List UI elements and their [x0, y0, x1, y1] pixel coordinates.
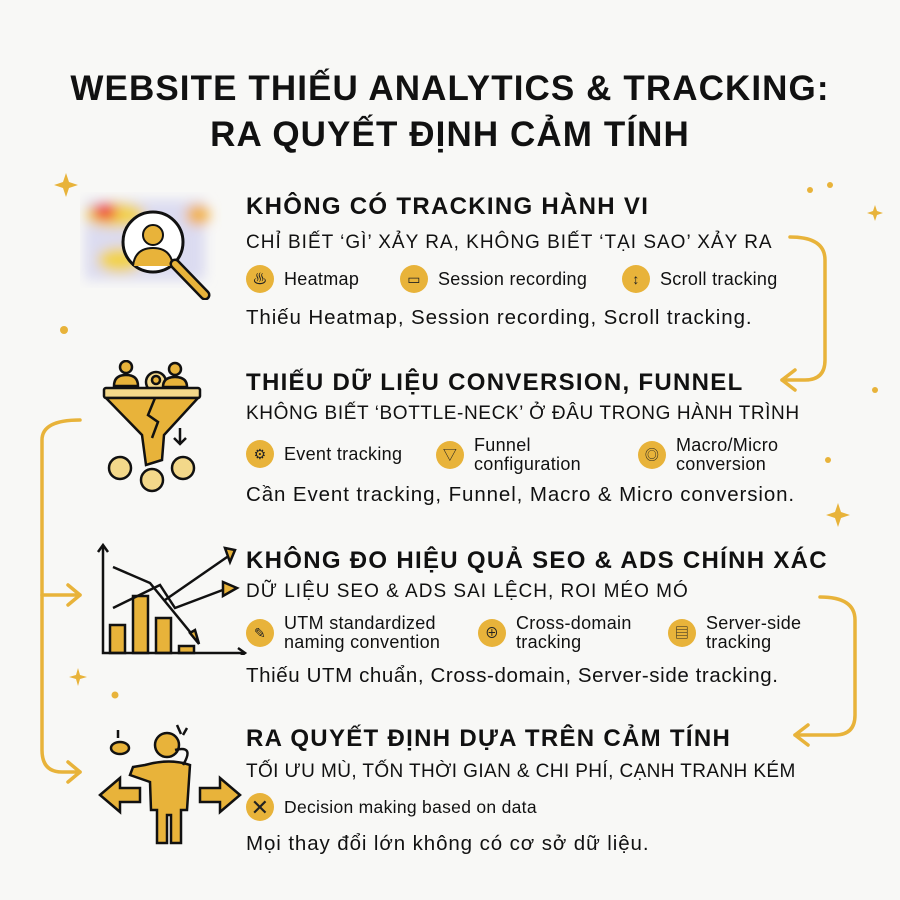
section 3: Server-side — [706, 613, 801, 633]
section 3: ⊕ — [485, 624, 499, 640]
section 2: ◎ — [645, 446, 659, 462]
icon: confused person — [98, 724, 242, 844]
heading 3: KHÔNG ĐO HIỆU QUẢ SEO & ADS CHÍNH XÁC — [246, 547, 828, 574]
icon: heatmap magnifier — [80, 194, 218, 300]
body 4: Mọi thay đổi lớn không có cơ sở dữ liệu. — [246, 832, 649, 855]
section 3 — [246, 546, 828, 687]
section 4 — [246, 724, 796, 855]
chips 1: Session recording — [438, 268, 587, 288]
chip 4: Decision making based on data — [284, 796, 537, 816]
section 2: Macro/Micro — [676, 435, 778, 455]
chips 2: ⚙ — [254, 446, 266, 462]
icon: chart — [97, 543, 247, 655]
heading 4: RA QUYẾT ĐỊNH DỰA TRÊN CẢM TÍNH — [246, 725, 731, 752]
chip 4 — [246, 793, 537, 821]
chips 3 — [246, 613, 440, 652]
chips 1: Scroll tracking — [660, 268, 778, 288]
subheading 4: TỐI ƯU MÙ, TỐN THỜI GIAN & CHI PHÍ, CẠNH TRANH KÉM — [246, 761, 796, 782]
title: RA QUYẾT ĐỊNH CẢM TÍNH — [210, 115, 690, 154]
chips 1 — [246, 265, 778, 293]
title: WEBSITE THIẾU ANALYTICS & TRACKING: — [70, 69, 830, 108]
chip 4: ✕ — [251, 794, 269, 820]
chips 1: Heatmap — [284, 268, 359, 288]
icon: broken funnel — [102, 360, 202, 492]
section 3: tracking — [706, 632, 771, 652]
chips 1: ↕ — [632, 270, 640, 286]
subheading 2: KHÔNG BIẾT ‘BOTTLE-NECK’ Ở ĐÂU TRONG HÀNH TRÌNH — [246, 403, 800, 424]
title — [70, 68, 830, 154]
section 2: Funnel — [474, 435, 531, 455]
section 2: ▽ — [443, 446, 457, 462]
heading 2: THIẾU DỮ LIỆU CONVERSION, FUNNEL — [246, 369, 744, 396]
chips 1: ♨ — [253, 270, 267, 286]
subheading 1: CHỈ BIẾT ‘GÌ’ XẢY RA, KHÔNG BIẾT ‘TẠI SAO’ XẢY RA — [246, 232, 773, 253]
subheading 3: DỮ LIỆU SEO & ADS SAI LỆCH, ROI MÉO MÓ — [246, 581, 689, 602]
body 1: Thiếu Heatmap, Session recording, Scroll tracking. — [246, 306, 752, 329]
section 2 — [246, 368, 800, 506]
section 2: configuration — [474, 454, 581, 474]
chips 2: Event tracking — [284, 444, 402, 464]
heading 1: KHÔNG CÓ TRACKING HÀNH VI — [246, 193, 649, 220]
chips 1: ▭ — [407, 270, 421, 286]
chips 3: UTM standardized — [284, 613, 436, 633]
body 3: Thiếu UTM chuẩn, Cross-domain, Server-side tracking. — [246, 664, 778, 687]
body 2: Cần Event tracking, Funnel, Macro & Micro conversion. — [246, 483, 795, 506]
chips 3: naming convention — [284, 632, 440, 652]
section 3: ▤ — [675, 624, 689, 640]
section 3: tracking — [516, 632, 581, 652]
section 3: Cross-domain — [516, 613, 632, 633]
section 2: conversion — [676, 454, 766, 474]
chips 2 — [246, 440, 402, 468]
chips 3: ✎ — [254, 624, 266, 640]
section 1 — [246, 192, 778, 329]
